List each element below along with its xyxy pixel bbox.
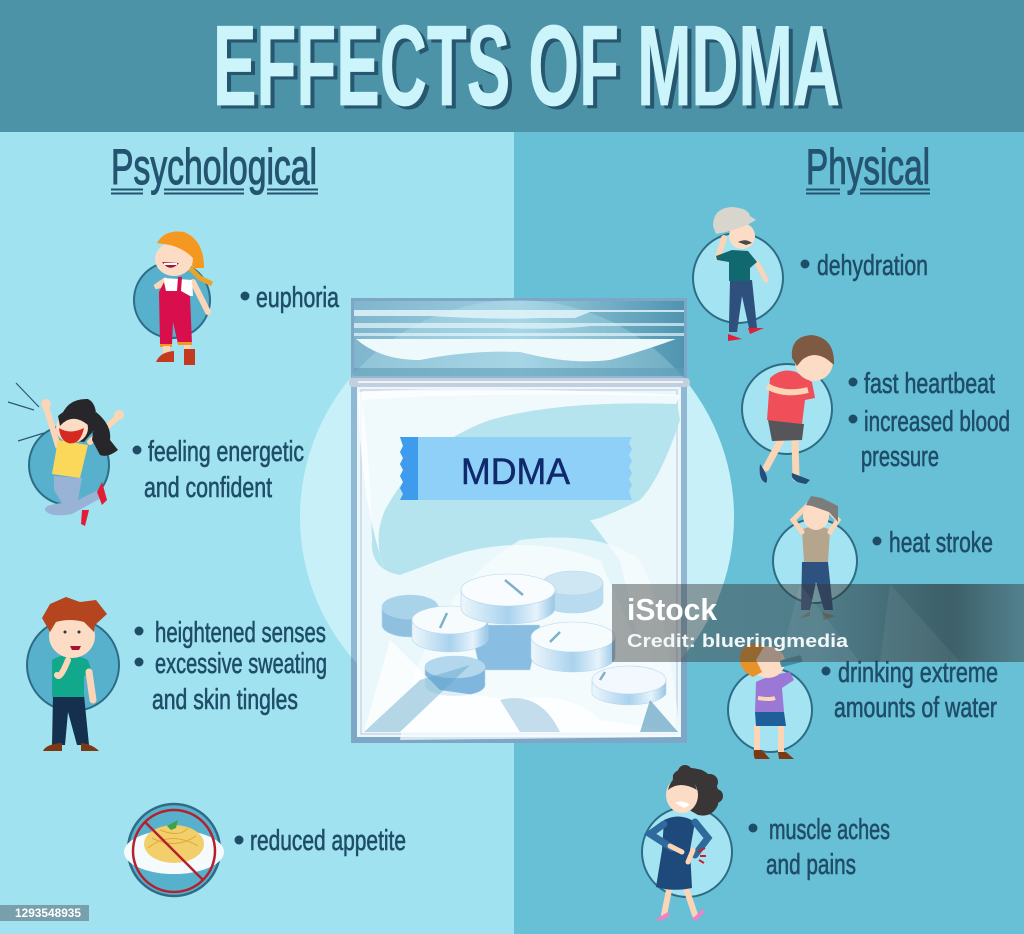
text: feeling energetic: and confident [144, 472, 272, 504]
image id tag: 1293548935 [15, 906, 81, 920]
item: reduced appetite [124, 804, 406, 896]
text: reduced appetite: reduced appetite [250, 825, 406, 857]
background circle behind bag [300, 300, 734, 734]
item: euphoria [134, 231, 340, 365]
watermark: iStock credit bar: iStock [627, 592, 718, 627]
heading: Psychological [111, 139, 318, 195]
text: heightened senses: and skin tingles [152, 684, 298, 716]
text: heightened senses: heightened senses [155, 617, 326, 649]
text: feeling energetic [132, 436, 304, 504]
heading: Physical: Physical [806, 139, 930, 195]
text: reduced appetite [234, 825, 406, 857]
text: fast heartbeat: pressure [861, 441, 939, 473]
watermark: iStock credit bar: Credit: blueringmedia [627, 631, 849, 651]
text: feeling energetic: feeling energetic [148, 436, 304, 468]
icon: crossed-out plate of spaghetti [124, 804, 224, 896]
heading: Physical [806, 139, 930, 195]
icon: woman with back pain [642, 765, 732, 921]
text: drinking extreme [822, 657, 998, 724]
text: heightened senses [134, 617, 327, 716]
text: heightened senses: excessive sweating [155, 648, 327, 680]
header band [0, 0, 1024, 132]
icon: jumping girl [8, 383, 124, 526]
image id tag [0, 905, 89, 921]
icon: laughing girl [134, 231, 212, 365]
text: fast heartbeat [848, 368, 1010, 473]
watermark: iStock credit bar [612, 584, 1024, 662]
label: MDMA: MDMA [461, 451, 570, 492]
item: dehydration [693, 207, 928, 341]
bag body [357, 387, 681, 737]
panel: left background [0, 132, 514, 934]
text: dehydration [800, 250, 928, 282]
heading: Psychological: Psychological [111, 139, 317, 195]
text: muscle aches [748, 814, 890, 881]
text: dehydration: dehydration [817, 250, 928, 282]
text: euphoria [240, 282, 340, 314]
text: muscle aches: and pains [766, 849, 856, 881]
panel: right background [514, 132, 1024, 934]
tablets [382, 571, 666, 705]
text: heat stroke [872, 527, 993, 559]
item: heightened senses [27, 597, 327, 751]
icon: boy drinking water [728, 643, 812, 759]
item: heat stroke [773, 496, 993, 620]
text: muscle aches: muscle aches [769, 814, 890, 846]
item: fast heartbeat and blood pressure [742, 335, 1010, 484]
item: muscle aches [642, 765, 890, 921]
icon: man with cap [693, 207, 783, 341]
icon: man holding head [773, 496, 857, 620]
icon: sweating boy [27, 597, 119, 751]
item: feeling energetic and confident [8, 383, 304, 526]
icon: zip bag with tablets [349, 298, 690, 743]
item: drinking water [728, 643, 998, 759]
label: MDMA [400, 437, 632, 500]
icon: boy holding chest [742, 335, 834, 484]
text: euphoria: euphoria [256, 282, 340, 314]
